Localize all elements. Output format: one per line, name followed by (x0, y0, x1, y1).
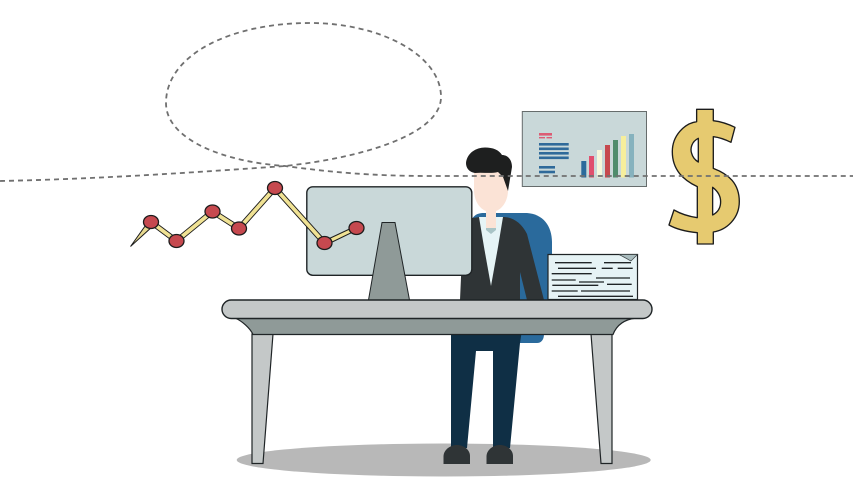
desk left leg (252, 334, 273, 464)
floor shadow (237, 444, 651, 476)
chart line (130, 188, 357, 246)
legs (451, 330, 522, 448)
office chair (472, 213, 552, 343)
shoes (444, 445, 513, 464)
hair (466, 148, 512, 191)
chart nodes (144, 182, 364, 250)
line chart (130, 182, 364, 250)
shirt and collar (479, 217, 503, 286)
folded corner (619, 254, 638, 261)
poster text lines (539, 133, 569, 173)
desk apron (235, 318, 637, 334)
face (474, 165, 508, 212)
desk top (222, 300, 652, 318)
jacket (460, 217, 544, 300)
paper stack (548, 254, 638, 300)
dashed thought path (0, 23, 853, 181)
desk (222, 300, 652, 464)
neck (486, 205, 496, 228)
monitor stand (368, 222, 410, 300)
icon: dollar sign (669, 109, 739, 244)
computer monitor (307, 187, 472, 300)
poster bar chart (581, 134, 634, 178)
desk right leg (591, 334, 612, 464)
document text lines (552, 263, 633, 296)
wall chart poster (522, 112, 646, 186)
